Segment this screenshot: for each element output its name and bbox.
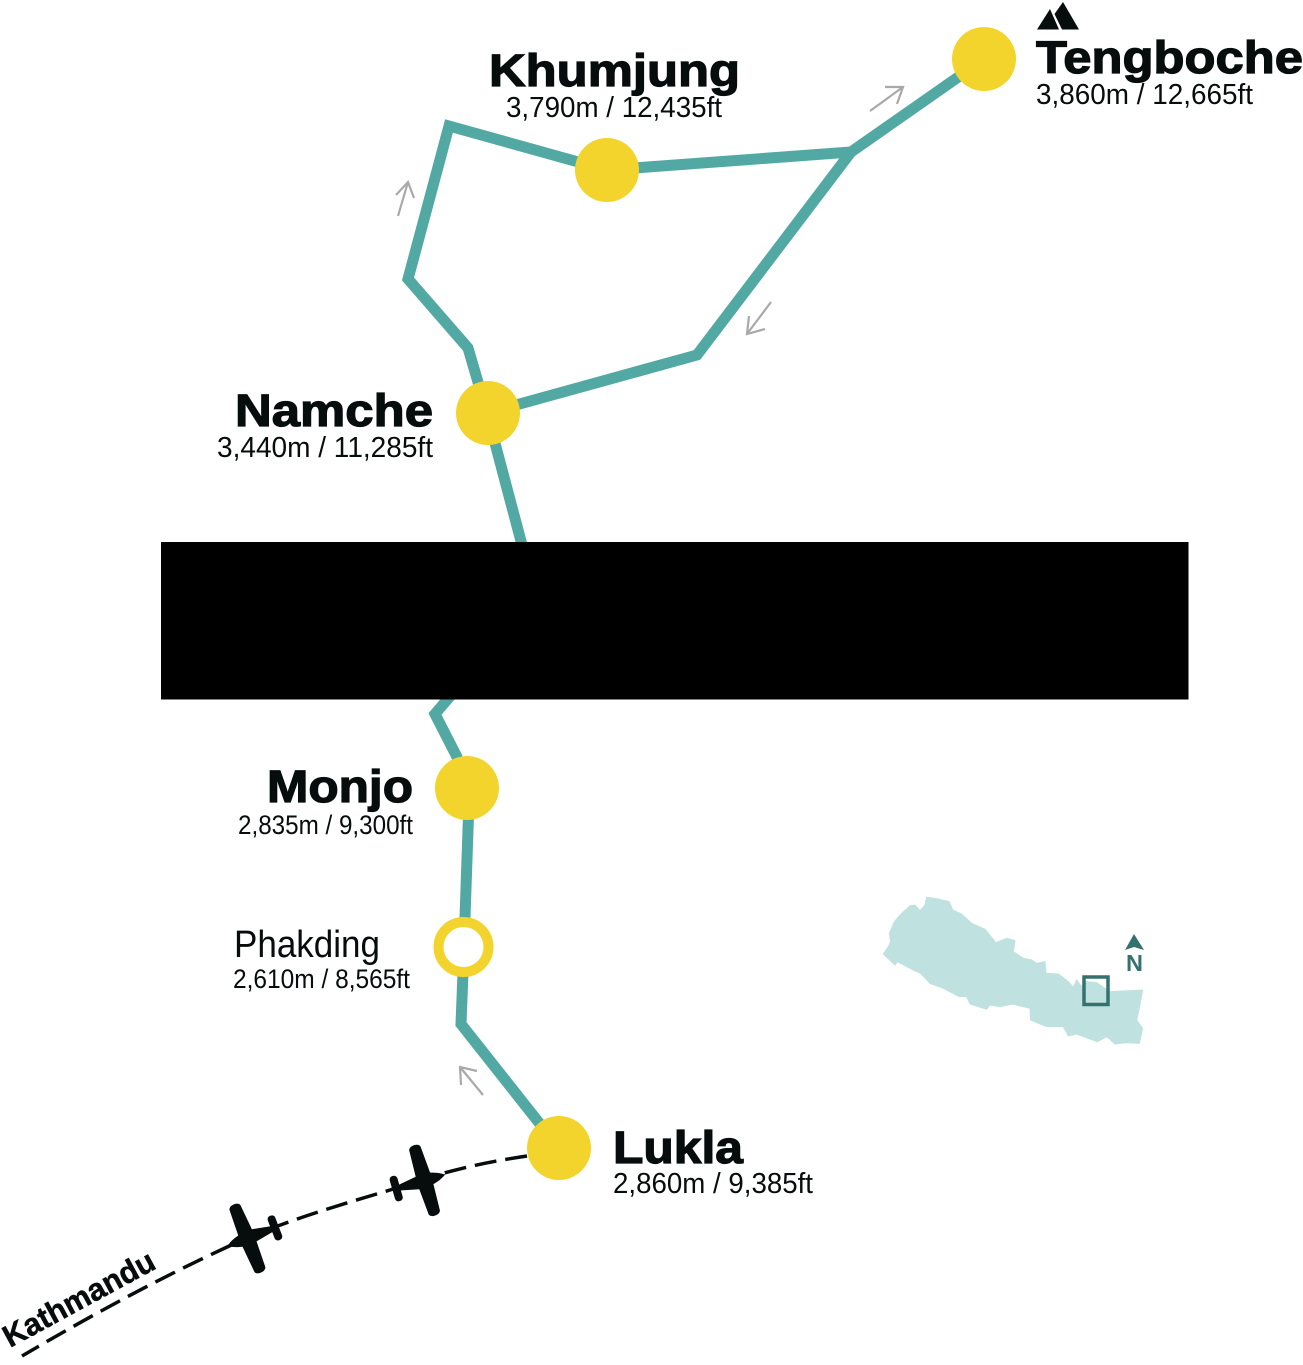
stop: Namche: Namche <box>235 385 433 436</box>
stop: Lukla: Lukla <box>613 1122 744 1173</box>
flight path to Kathmandu <box>22 1156 527 1356</box>
icon: mountain peaks <box>1037 2 1079 30</box>
stop: Lukla <box>527 1116 813 1200</box>
plane icon: upper <box>382 1139 455 1225</box>
stop: Phakding: Phakding <box>234 924 380 966</box>
stop: Tengboche: 3,860m / 12,665ft <box>1036 79 1253 111</box>
stop: Khumjung: 3,790m / 12,435ft <box>506 92 722 124</box>
plane icon: lower <box>214 1192 292 1280</box>
stop: Lukla: 2,860m / 9,385ft <box>613 1168 813 1200</box>
north arrow <box>1125 934 1144 976</box>
stop: Khumjung <box>489 45 740 202</box>
stop: Khumjung: Khumjung <box>489 45 740 96</box>
direction arrows <box>396 87 903 1095</box>
stop: Tengboche: Tengboche <box>1036 32 1303 83</box>
redaction bar <box>161 542 1188 700</box>
stop: Monjo: 2,835m / 9,300ft <box>238 810 413 840</box>
region locator square <box>1084 977 1108 1004</box>
north arrow: N <box>1126 950 1143 976</box>
stop: Tengboche <box>952 2 1303 111</box>
stop: Phakding <box>233 922 488 994</box>
trek route line <box>408 59 984 1148</box>
stop: Monjo: Monjo <box>267 761 413 812</box>
stop: Namche <box>217 381 520 464</box>
inset map of Nepal <box>883 897 1144 1044</box>
stop: Phakding: 2,610m / 8,565ft <box>233 964 410 994</box>
label: Kathmandu: Kathmandu <box>0 1243 161 1354</box>
stop: Monjo <box>238 756 499 840</box>
stop: Namche: 3,440m / 11,285ft <box>217 432 433 464</box>
Nepal country shape <box>883 897 1143 1044</box>
